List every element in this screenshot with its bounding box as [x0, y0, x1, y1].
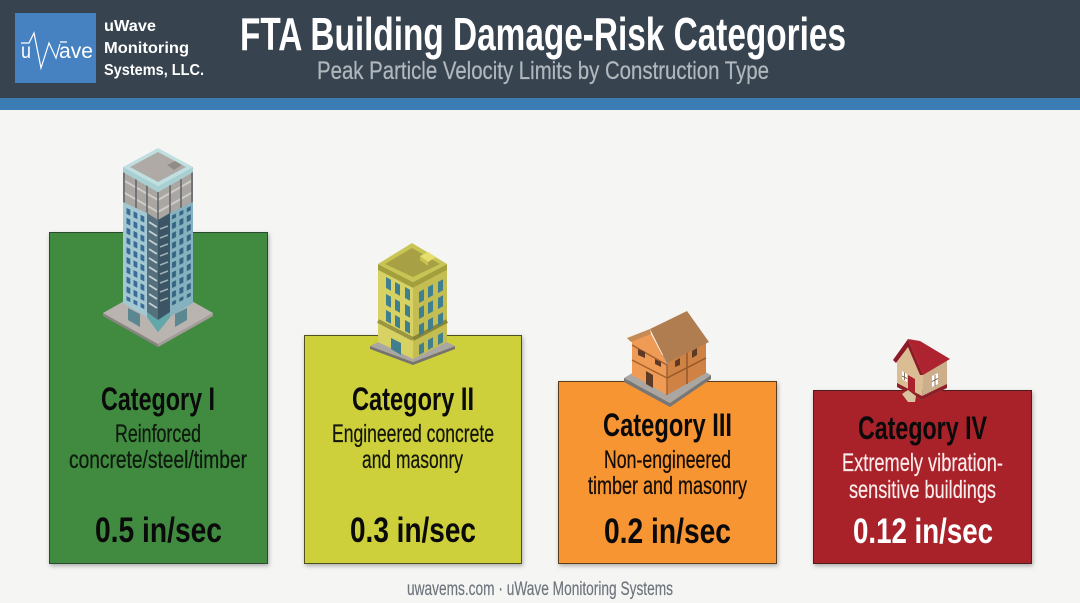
heading: Category IV: Category IV	[858, 410, 987, 446]
subtitle: Peak Particle Velocity Limits by Construction Type	[317, 57, 769, 85]
panel: Category III	[558, 382, 776, 564]
description: Category II	[332, 420, 494, 474]
logo: uWave mark: ave	[59, 40, 93, 63]
company name: Monitoring	[104, 40, 189, 57]
panel: Category I	[50, 232, 268, 564]
logo: uWave mark: u	[21, 40, 31, 63]
description: Category I: Reinforced	[115, 420, 201, 448]
description: Category IV: Extremely vibration-	[842, 449, 1003, 477]
description: Category II: and masonry	[362, 446, 463, 474]
value: 0.3 in/sec: 0.3 in/sec	[350, 511, 476, 550]
heading: Category I: Category I	[101, 381, 215, 417]
header band	[0, 0, 1080, 110]
value: 0.2 in/sec: 0.2 in/sec	[604, 512, 731, 551]
description: Category I: concrete/steel/timber	[69, 446, 247, 474]
description: Category III: timber and masonry	[588, 472, 747, 500]
icon: small house	[893, 339, 950, 402]
icon: timber house	[624, 311, 711, 407]
description: Category II: Engineered concrete	[332, 420, 494, 448]
company name: Systems, LLC.	[104, 62, 204, 79]
description: Category IV: sensitive buildings	[849, 476, 996, 504]
description: Category III: Non-engineered	[604, 446, 731, 474]
value: 0.12 in/sec: 0.12 in/sec	[853, 512, 993, 551]
panel: Category II	[304, 336, 522, 564]
heading: Category II: Category II	[352, 381, 474, 417]
title: FTA Building Damage-Risk Categories	[240, 8, 846, 60]
description: Category III	[588, 446, 747, 500]
company name: uWave	[104, 18, 156, 35]
icon: mid-rise building	[370, 243, 455, 365]
description: Category I	[69, 420, 247, 474]
heading: Category III: Category III	[603, 407, 732, 443]
footer credit: uwavems.com · uWave Monitoring Systems	[407, 579, 673, 600]
icon: high-rise tower	[103, 148, 213, 347]
company name	[104, 18, 204, 79]
value: 0.5 in/sec: 0.5 in/sec	[95, 511, 222, 550]
panel: Category IV	[814, 390, 1032, 564]
description: Category IV	[842, 449, 1003, 504]
logo: uWave mark	[15, 13, 96, 83]
